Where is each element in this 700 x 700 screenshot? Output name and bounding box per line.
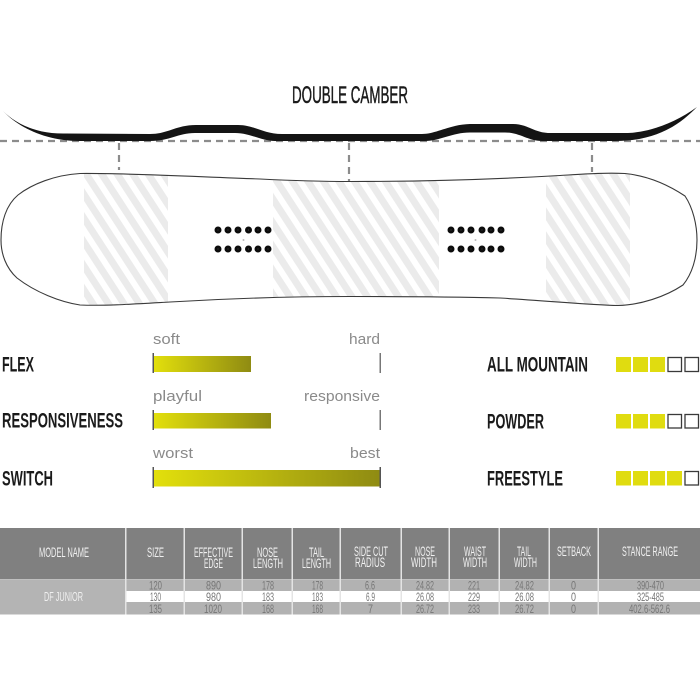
table data rows: 24.82 xyxy=(416,580,434,592)
responsiveness rating: playful xyxy=(153,388,202,405)
switch rating: best xyxy=(350,445,381,462)
snowboard top view xyxy=(1,170,697,307)
table data rows: 26.72 xyxy=(416,604,434,616)
table data rows: 168 xyxy=(262,604,274,616)
table data rows: 6.9 xyxy=(366,592,375,604)
table header row: EDGE xyxy=(204,555,223,571)
binding inserts: right xyxy=(449,228,503,251)
table data rows: 233 xyxy=(468,604,480,616)
table header row: WIDTH xyxy=(411,554,437,570)
all mountain score: ALL MOUNTAIN xyxy=(487,354,588,376)
responsiveness rating: responsive xyxy=(304,388,380,405)
table header row: WIDTH xyxy=(514,554,537,570)
table data rows: 402.6-562.6 xyxy=(629,604,670,616)
table data rows: 183 xyxy=(262,592,274,604)
camber baseline dashed guide xyxy=(0,141,700,182)
table data rows: 24.82 xyxy=(515,580,534,592)
table header row: WAIST xyxy=(464,543,486,559)
table data rows: 229 xyxy=(468,592,480,604)
reinforcement hatch zones xyxy=(84,170,630,307)
table data rows: 7 xyxy=(368,604,373,616)
table header row: WIDTH xyxy=(463,554,487,570)
table data rows: DF JUNIOR xyxy=(44,589,83,604)
table data rows: 183 xyxy=(312,592,323,604)
table header row: MODEL NAME xyxy=(39,544,89,560)
flex rating xyxy=(2,331,381,376)
table data rows: 168 xyxy=(312,604,323,616)
flex rating: FLEX xyxy=(2,354,34,376)
table data rows: 135 xyxy=(149,604,162,616)
table data rows: 0 xyxy=(571,592,576,604)
table header row: RADIUS xyxy=(355,554,385,570)
powder score xyxy=(487,410,698,434)
table data rows: 178 xyxy=(312,580,323,592)
table data rows: 980 xyxy=(206,592,221,604)
table data rows xyxy=(0,580,700,616)
table header row: LENGTH xyxy=(253,555,283,571)
table data rows: 26.08 xyxy=(416,592,434,604)
switch rating: worst xyxy=(152,445,194,462)
table data rows: 0 xyxy=(571,580,576,592)
binding inserts: left xyxy=(216,228,270,251)
spec table xyxy=(0,528,700,616)
table data rows: 26.08 xyxy=(515,592,534,604)
responsiveness rating: RESPONSIVENESS xyxy=(2,410,123,432)
table header row: TAIL xyxy=(309,544,324,560)
table header row: NOSE xyxy=(257,544,278,560)
title: DOUBLE CAMBER xyxy=(292,82,408,109)
switch rating xyxy=(2,445,381,490)
flex rating: hard xyxy=(349,331,380,348)
infographic canvas xyxy=(0,86,700,614)
table header row: SIZE xyxy=(147,544,164,560)
table data rows: 120 xyxy=(149,580,162,592)
table header row: EFFECTIVE xyxy=(194,544,233,560)
table data rows: 0 xyxy=(571,604,576,616)
switch rating: SWITCH xyxy=(2,468,53,490)
table data rows: 1020 xyxy=(204,604,222,616)
table data rows: 221 xyxy=(468,580,480,592)
table data rows: 890 xyxy=(206,580,221,592)
powder score: POWDER xyxy=(487,410,544,434)
table header row: NOSE xyxy=(415,543,435,559)
table header row: SETBACK xyxy=(557,543,591,559)
table data rows: 26.72 xyxy=(515,604,534,616)
board outline xyxy=(1,173,697,306)
table header row xyxy=(0,528,700,580)
table data rows: 6.6 xyxy=(365,580,375,592)
column separators xyxy=(125,528,599,614)
table data rows: 178 xyxy=(262,580,274,592)
table header row: LENGTH xyxy=(302,555,331,571)
table data rows: 130 xyxy=(150,592,161,604)
flex rating: soft xyxy=(153,331,181,348)
camber profile xyxy=(3,107,697,141)
table header row: SIDE CUT xyxy=(354,543,388,559)
responsiveness rating xyxy=(2,388,381,432)
freestyle score: FREESTYLE xyxy=(487,468,563,490)
table data rows: 390-470 xyxy=(637,580,664,592)
freestyle score xyxy=(487,468,698,490)
table data rows: 325-485 xyxy=(637,592,664,604)
table header row: TAIL xyxy=(517,543,531,559)
